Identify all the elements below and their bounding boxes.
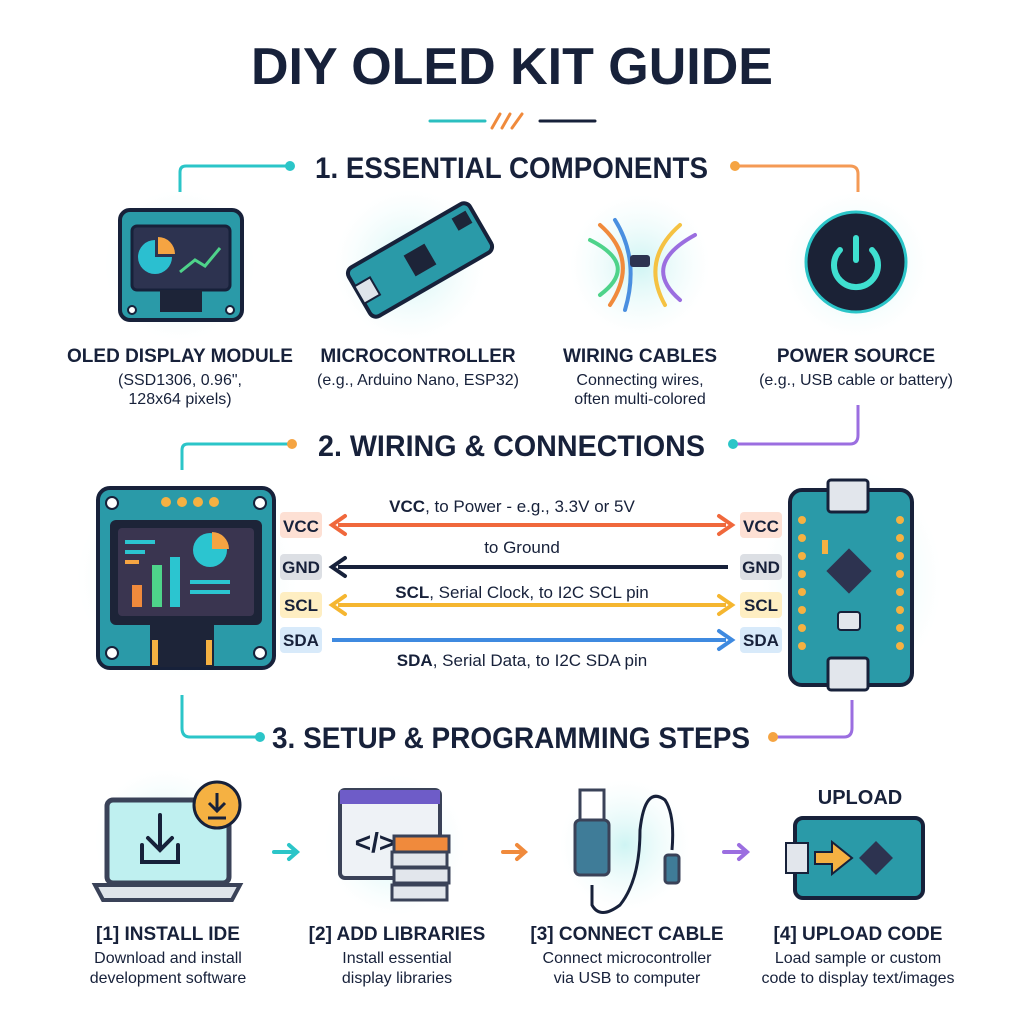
icon: code libraries: </> (355, 827, 395, 858)
step labels: [1] INSTALL IDE (96, 924, 240, 945)
panel: components: (SSD1306, 0.96", (118, 372, 242, 389)
step labels: [4] UPLOAD CODE (774, 924, 942, 945)
wiring: sda: SDA, Serial Data, to I2C SDA pin (397, 651, 647, 670)
panel: steps: Load sample or custom (775, 950, 941, 967)
wiring: gnd: GND (282, 558, 320, 577)
wiring: vcc: VCC, to Power - e.g., 3.3V or 5V (389, 497, 635, 516)
wiring: scl (280, 583, 782, 618)
wiring: vcc (280, 497, 782, 538)
section 2 heading (182, 405, 858, 470)
title divider (430, 114, 595, 128)
wiring: scl: SCL (284, 596, 318, 615)
wiring: vcc: VCC (743, 517, 779, 536)
panel: steps: Connect microcontroller (543, 950, 712, 967)
component labels: POWER SOURCE (777, 346, 935, 367)
section 2 heading: 2. WIRING & CONNECTIONS (318, 430, 705, 463)
step labels (96, 924, 942, 945)
component labels: OLED DISPLAY MODULE (67, 346, 293, 367)
panel: components: 128x64 pixels) (128, 391, 232, 408)
component labels (67, 346, 935, 367)
section 1 heading: 1. ESSENTIAL COMPONENTS (315, 152, 708, 185)
panel: components: (e.g., USB cable or battery) (759, 372, 953, 389)
title: DIY OLED KIT GUIDE (251, 38, 773, 96)
panel: steps (90, 770, 954, 987)
arrow (503, 845, 525, 859)
icon: microcontroller (335, 190, 495, 340)
wiring: sda (280, 627, 782, 670)
panel: components: (e.g., Arduino Nano, ESP32) (317, 372, 519, 389)
wiring: gnd (280, 538, 782, 580)
panel: steps: display libraries (342, 970, 452, 987)
arrow (274, 845, 297, 859)
icon: upload board: UPLOAD (818, 787, 902, 809)
icon: power button (784, 193, 928, 337)
icon: upload board (786, 787, 923, 898)
wiring: vcc: VCC (283, 517, 319, 536)
icon: microcontroller board (762, 470, 942, 690)
icon: oled board (77, 478, 297, 678)
step labels: [2] ADD LIBRARIES (309, 924, 485, 945)
panel: steps: Download and install (94, 950, 242, 967)
wiring: scl: SCL, Serial Clock, to I2C SCL pin (395, 583, 649, 602)
panel: steps: via USB to computer (554, 970, 701, 987)
icon: laptop install (95, 770, 240, 910)
panel: components (67, 190, 953, 408)
panel: components: often multi-colored (574, 391, 706, 408)
panel: steps: Install essential (342, 950, 452, 967)
wiring: scl: SCL (744, 596, 778, 615)
section 3 heading: 3. SETUP & PROGRAMMING STEPS (272, 722, 750, 755)
panel: components: Connecting wires, (576, 372, 704, 389)
component labels: MICROCONTROLLER (320, 346, 516, 367)
section 3 heading (182, 695, 852, 755)
wiring: sda: SDA (743, 631, 779, 650)
icon: oled module (105, 190, 255, 340)
section 1 heading (180, 152, 858, 192)
wiring: sda: SDA (283, 631, 319, 650)
icon: wiring cables (570, 195, 710, 335)
arrow (724, 845, 747, 859)
panel: steps: development software (90, 970, 246, 987)
wiring: gnd: to Ground (484, 538, 560, 557)
icon: code libraries (325, 775, 465, 915)
component labels: WIRING CABLES (563, 346, 717, 367)
icon: usb cable (560, 780, 690, 912)
step labels: [3] CONNECT CABLE (530, 924, 724, 945)
panel: steps: code to display text/images (762, 970, 954, 987)
wiring: gnd: GND (742, 558, 780, 577)
